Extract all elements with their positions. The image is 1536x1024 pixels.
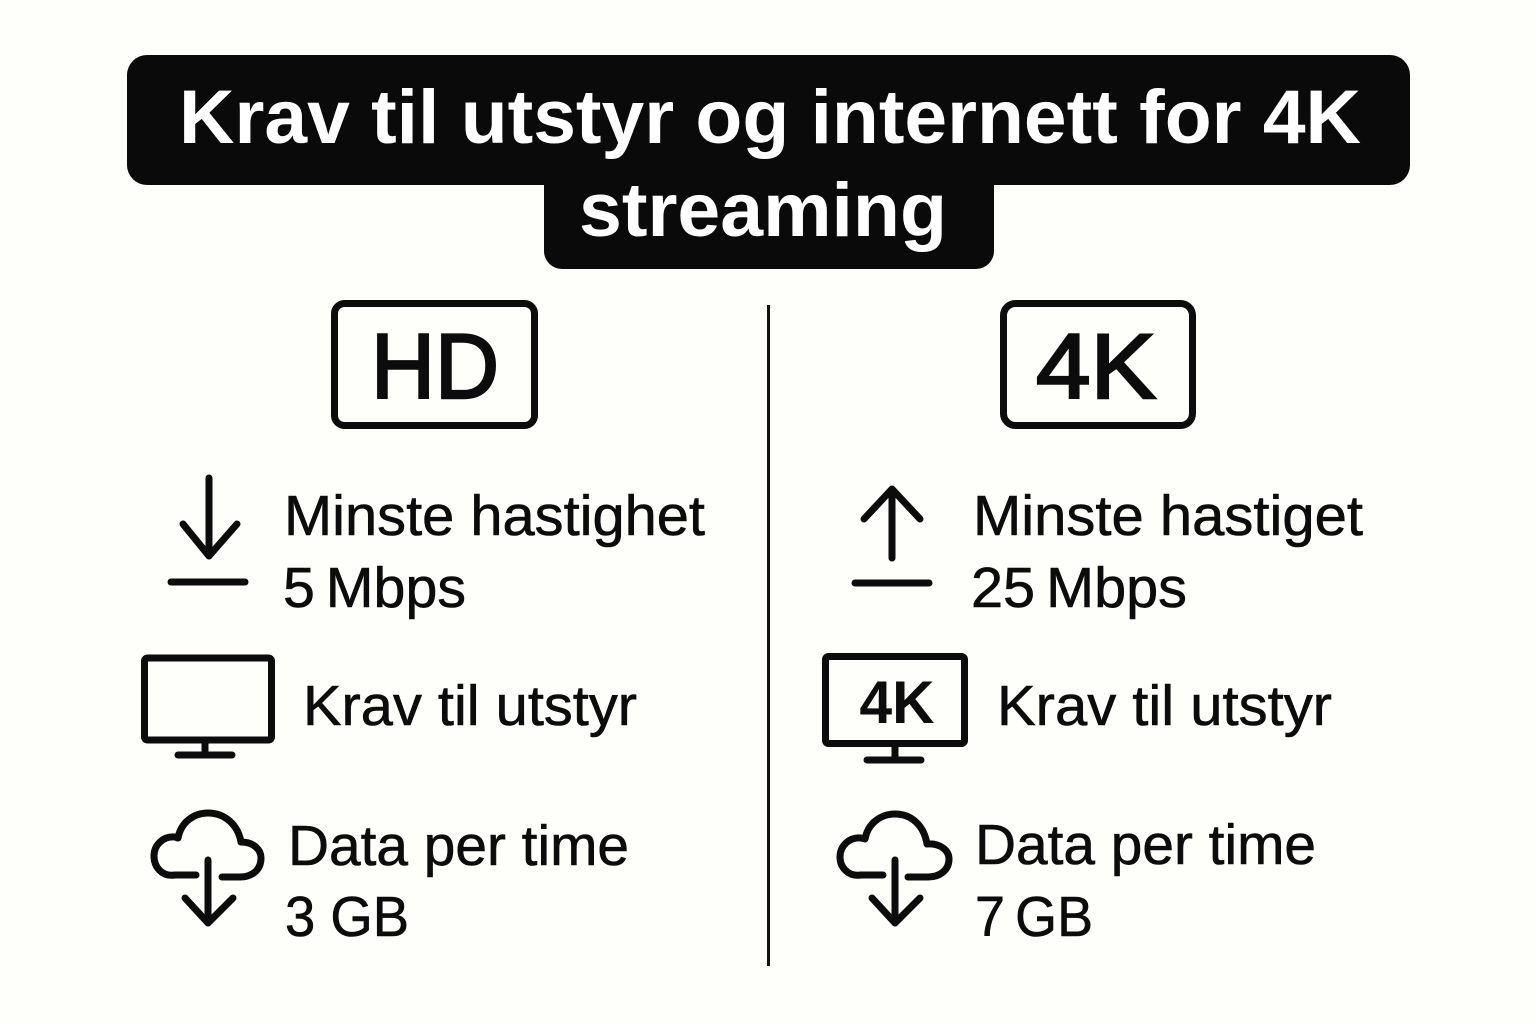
minimum speed HD: 5 Mbps (283, 556, 466, 620)
icon: 4K monitor (826, 656, 964, 760)
icon: 4K monitor: 4K (860, 669, 934, 736)
data per hour HD (285, 814, 629, 949)
panel: HD (144, 304, 705, 949)
panel: 4K (826, 304, 1363, 949)
data per hour 4K: Data per time (975, 813, 1316, 877)
minimum speed HD: Minste hastighet (284, 484, 705, 548)
equipment requirement HD: Krav til utstyr (303, 674, 637, 738)
icon: upload speed (855, 489, 929, 583)
minimum speed 4K: Minste hastiget (973, 484, 1363, 548)
minimum speed 4K (971, 484, 1363, 620)
4K badge (1004, 304, 1192, 426)
4K badge: 4K (1036, 316, 1156, 418)
minimum speed HD (283, 484, 705, 620)
title (127, 55, 1410, 269)
icon: monitor (144, 658, 272, 755)
minimum speed 4K: 25 Mbps (971, 556, 1187, 620)
divider (767, 305, 770, 966)
data per hour 4K: 7 GB (975, 885, 1093, 949)
title: streaming (579, 168, 947, 253)
data per hour 4K (975, 813, 1316, 949)
data per hour HD: 3 GB (285, 885, 409, 949)
icon: cloud download (840, 814, 949, 923)
equipment requirement 4K: Krav til utstyr (997, 674, 1332, 738)
HD badge: HD (371, 316, 499, 418)
HD badge (334, 304, 534, 426)
icon: cloud download (154, 813, 261, 923)
title: Krav til utstyr og internett for 4K (179, 75, 1361, 160)
data per hour HD: Data per time (288, 814, 629, 878)
icon: download speed (171, 478, 245, 582)
